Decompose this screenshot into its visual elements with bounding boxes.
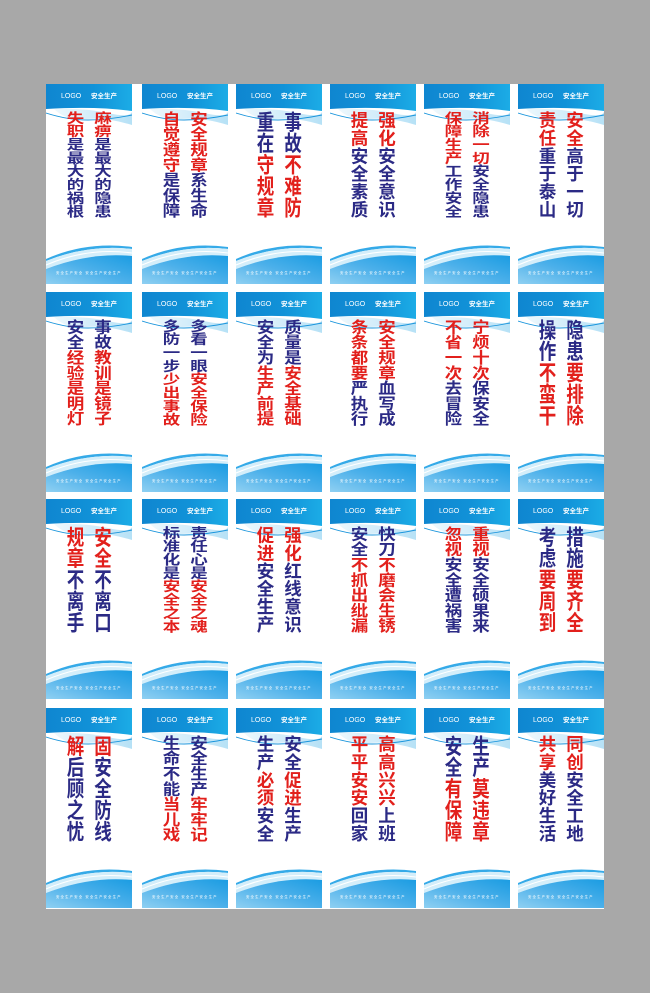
header logo: 安全生产 <box>563 93 589 100</box>
footer caption: 安全生产安全 安全生产安全生产 <box>434 686 500 690</box>
footer caption: 安全生产安全 安全生产安全生产 <box>152 686 218 690</box>
header logo <box>61 300 117 308</box>
slogan left: 安全 有保障 <box>443 734 463 842</box>
header logo: 安全生产 <box>563 717 589 724</box>
slogan left: 生命不能 当儿戏 <box>161 734 181 841</box>
slogan right: 责任心是 安全之魂 <box>188 526 208 632</box>
slogan right: 措施 要齐全 <box>564 526 584 633</box>
footer caption: 安全生产安全 安全生产安全生产 <box>528 895 594 899</box>
footer caption: 安全生产安全 安全生产安全生产 <box>528 686 594 690</box>
footer caption: 安全生产安全 安全生产安全生产 <box>528 271 594 275</box>
slogan right: 麻痹 是最大的隐患 <box>92 110 112 217</box>
slogan left: 平平安安 回家 <box>349 734 369 841</box>
slogan right: 宁烦十次 保安全 <box>470 318 490 425</box>
slogan right: 生产 莫违章 <box>470 734 490 842</box>
footer caption: 安全生产安全 安全生产安全生产 <box>434 479 500 483</box>
panel: row 4 col 4 <box>330 708 416 908</box>
header logo: LOGO <box>439 301 459 308</box>
header logo: LOGO <box>533 717 553 724</box>
header logo: LOGO <box>439 508 459 515</box>
panel: row 3 col 2 <box>142 499 228 699</box>
slogan left: 安全 不抓出纰漏 <box>349 526 369 632</box>
panel: row 2 col 2 <box>142 292 228 492</box>
footer caption: 安全生产安全 安全生产安全生产 <box>152 271 218 275</box>
header logo: LOGO <box>61 717 81 724</box>
slogan left: 操作 不蛮干 <box>537 318 557 426</box>
slogan right: 安全规章 系生命 <box>188 110 208 217</box>
header logo: 安全生产 <box>469 93 495 100</box>
slogan right: 安全生产 牢牢记 <box>188 734 208 841</box>
footer caption: 安全生产安全 安全生产安全生产 <box>340 686 406 690</box>
slogan left: 安全为 生产前提 <box>255 318 275 425</box>
slogan right: 安全 不离口 <box>92 526 112 633</box>
header logo: LOGO <box>157 301 177 308</box>
slogan right: 安全 促进 生产 <box>282 734 302 841</box>
header logo <box>345 300 401 308</box>
slogan left: 自觉遵守 是保障 <box>161 110 181 217</box>
header logo <box>61 92 117 100</box>
panel: row 1 col 4 <box>330 84 416 284</box>
header logo: 安全生产 <box>563 508 589 515</box>
white backing sheet <box>46 84 604 909</box>
header logo: 安全生产 <box>187 93 213 100</box>
header logo: 安全生产 <box>469 717 495 724</box>
footer caption: 安全生产安全 安全生产安全生产 <box>56 479 122 483</box>
slogan right: 安全规章 血写成 <box>376 318 396 425</box>
header logo: 安全生产 <box>187 301 213 308</box>
header logo: LOGO <box>533 301 553 308</box>
footer caption: 安全生产安全 安全生产安全生产 <box>528 479 594 483</box>
header logo <box>157 507 213 515</box>
footer caption: 安全生产安全 安全生产安全生产 <box>152 479 218 483</box>
footer caption: 安全生产安全 安全生产安全生产 <box>246 895 312 899</box>
slogan right: 消除一切 安全隐患 <box>470 110 490 217</box>
slogan right: 强化 安全意识 <box>376 110 396 217</box>
slogan left: 责任 重于泰山 <box>537 110 557 217</box>
header logo: LOGO <box>251 508 271 515</box>
footer caption: 安全生产安全 安全生产安全生产 <box>340 895 406 899</box>
slogan left: 保障生产 工作安全 <box>443 110 463 217</box>
header logo <box>330 499 416 525</box>
header logo <box>142 708 228 734</box>
footer caption: 安全生产安全 安全生产安全生产 <box>56 686 122 690</box>
slogan left: 失职 是最大的祸根 <box>65 110 85 217</box>
header logo <box>157 300 213 308</box>
panel: row 4 col 2 <box>142 708 228 908</box>
header logo <box>251 92 307 100</box>
panel: row 3 col 3 <box>236 499 322 699</box>
slogan right: 同创 安全工地 <box>564 734 584 841</box>
slogan right: 固 安全防线 <box>92 734 112 842</box>
header logo: LOGO <box>157 93 177 100</box>
panel: row 4 col 5 <box>424 708 510 908</box>
footer caption: 安全生产安全 安全生产安全生产 <box>246 479 312 483</box>
header logo: 安全生产 <box>91 508 117 515</box>
header logo <box>424 708 510 734</box>
header logo <box>439 92 495 100</box>
header logo: LOGO <box>439 717 459 724</box>
slogan left: 忽视 安全遭祸害 <box>443 526 463 632</box>
footer caption: 安全生产安全 安全生产安全生产 <box>56 271 122 275</box>
header logo: 安全生产 <box>375 301 401 308</box>
panel: row 1 col 3 <box>236 84 322 284</box>
panel: row 4 col 1 <box>46 708 132 908</box>
panel: row 3 col 6 <box>518 499 604 699</box>
header logo <box>46 708 132 734</box>
slogan left: 提高 安全素质 <box>349 110 369 217</box>
header logo: 安全生产 <box>281 508 307 515</box>
header logo: 安全生产 <box>91 301 117 308</box>
slogan right: 多看一眼 安全保险 <box>188 318 208 425</box>
slogan right: 安全 高于一切 <box>564 110 584 217</box>
header logo <box>61 507 117 515</box>
panel: row 2 col 1 <box>46 292 132 492</box>
header logo: LOGO <box>345 301 365 308</box>
slogan left: 规章 不离手 <box>65 526 85 633</box>
slogan left: 不省一次 去冒险 <box>443 318 463 425</box>
header logo <box>345 92 401 100</box>
footer caption: 安全生产安全 安全生产安全生产 <box>246 271 312 275</box>
footer caption: 安全生产安全 安全生产安全生产 <box>56 895 122 899</box>
header logo: 安全生产 <box>91 93 117 100</box>
header logo: LOGO <box>439 93 459 100</box>
header logo <box>533 92 589 100</box>
slogan left: 生产 必须 安全 <box>255 734 275 841</box>
slogan right: 高高兴兴 上班 <box>376 734 396 841</box>
header logo: 安全生产 <box>375 93 401 100</box>
slogan left: 考虑 要周到 <box>537 526 557 633</box>
header logo: LOGO <box>345 508 365 515</box>
header logo <box>439 300 495 308</box>
footer caption: 安全生产安全 安全生产安全生产 <box>152 895 218 899</box>
footer caption: 安全生产安全 安全生产安全生产 <box>434 271 500 275</box>
header logo <box>533 300 589 308</box>
header logo: 安全生产 <box>281 301 307 308</box>
panel: row 2 col 6 <box>518 292 604 492</box>
panel: row 4 col 6 <box>518 708 604 908</box>
header logo <box>424 499 510 525</box>
header logo: LOGO <box>345 717 365 724</box>
panel: row 1 col 5 <box>424 84 510 284</box>
header logo: 安全生产 <box>91 717 117 724</box>
header logo: LOGO <box>61 93 81 100</box>
panel: row 2 col 3 <box>236 292 322 492</box>
slogan right: 快刀 不磨会生锈 <box>376 526 396 632</box>
header logo <box>236 499 322 525</box>
header logo: 安全生产 <box>563 301 589 308</box>
slogan right: 强化 红线意识 <box>282 526 302 632</box>
footer caption: 安全生产安全 安全生产安全生产 <box>434 895 500 899</box>
footer caption: 安全生产安全 安全生产安全生产 <box>246 686 312 690</box>
panel: row 4 col 3 <box>236 708 322 908</box>
slogan right: 事故 不难防 <box>282 110 302 218</box>
header logo: 安全生产 <box>281 93 307 100</box>
header logo <box>330 708 416 734</box>
header logo <box>251 300 307 308</box>
slogan left: 标准化是 安全之本 <box>161 526 181 632</box>
slogan left: 促进 安全生产 <box>255 526 275 632</box>
footer caption: 安全生产安全 安全生产安全生产 <box>340 271 406 275</box>
header logo <box>518 708 604 734</box>
header logo: LOGO <box>345 93 365 100</box>
header logo <box>236 708 322 734</box>
header logo: LOGO <box>251 717 271 724</box>
header logo: 安全生产 <box>187 508 213 515</box>
header logo: LOGO <box>61 508 81 515</box>
header logo: LOGO <box>251 301 271 308</box>
slogan right: 隐患 要排除 <box>564 318 584 426</box>
header logo: 安全生产 <box>375 717 401 724</box>
panel: row 1 col 6 <box>518 84 604 284</box>
slogan left: 重在 守规章 <box>255 110 275 218</box>
slogan right: 重视 安全硕果来 <box>470 526 490 632</box>
panel: row 3 col 5 <box>424 499 510 699</box>
slogan left: 解 后顾之忧 <box>65 734 85 842</box>
header logo <box>518 499 604 525</box>
panel: row 2 col 4 <box>330 292 416 492</box>
slogan right: 事故 教训是镜子 <box>92 318 112 425</box>
header logo: LOGO <box>157 717 177 724</box>
slogan right: 质量是 安全基础 <box>282 318 302 425</box>
header logo: LOGO <box>61 301 81 308</box>
header logo: 安全生产 <box>375 508 401 515</box>
slogan left: 安全 经验是明灯 <box>65 318 85 425</box>
header logo: 安全生产 <box>469 508 495 515</box>
header logo: 安全生产 <box>469 301 495 308</box>
footer caption: 安全生产安全 安全生产安全生产 <box>340 479 406 483</box>
slogan left: 共享 美好生活 <box>537 734 557 841</box>
slogan left: 多防一步 少出事故 <box>161 318 181 425</box>
header logo: LOGO <box>533 508 553 515</box>
panel: row 1 col 1 <box>46 84 132 284</box>
header logo: LOGO <box>533 93 553 100</box>
panel: row 2 col 5 <box>424 292 510 492</box>
header logo: 安全生产 <box>187 717 213 724</box>
header logo: LOGO <box>251 93 271 100</box>
header logo: 安全生产 <box>281 717 307 724</box>
panel: row 3 col 1 <box>46 499 132 699</box>
header logo <box>157 92 213 100</box>
panel: row 1 col 2 <box>142 84 228 284</box>
header logo: LOGO <box>157 508 177 515</box>
panel: row 3 col 4 <box>330 499 416 699</box>
slogan left: 条条都要 严执行 <box>349 318 369 425</box>
